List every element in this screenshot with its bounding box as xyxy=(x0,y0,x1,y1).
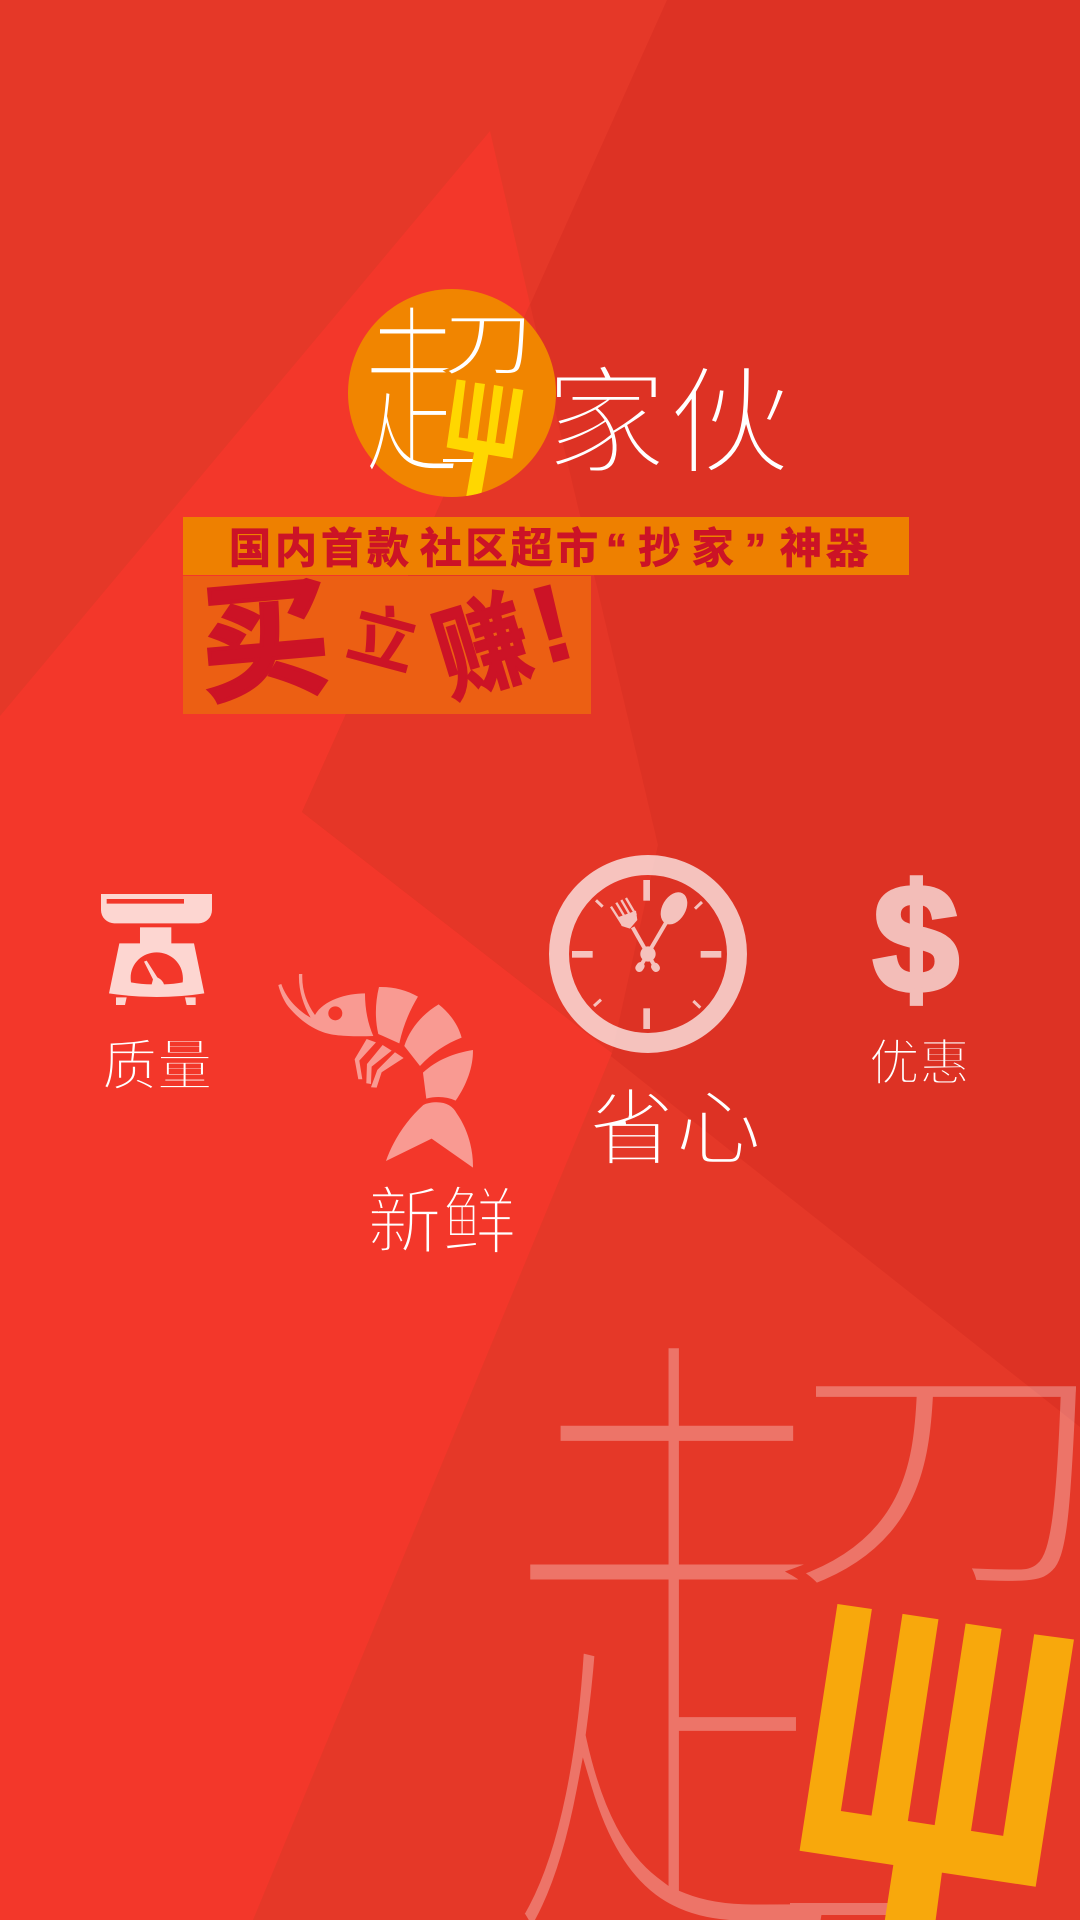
tagline text: 社区超市 xyxy=(420,525,598,572)
watermark character strokes xyxy=(524,1348,1076,1920)
tagline text: 国内首款 xyxy=(229,525,409,572)
label: 优惠 xyxy=(872,1039,966,1084)
fork hand xyxy=(611,898,656,968)
tagline text: “抄家” xyxy=(606,525,766,572)
icon: dollar sign: $ xyxy=(873,853,959,1025)
watermark: oversized logo xyxy=(524,1348,1076,1920)
tagline text: 神器 xyxy=(780,525,868,572)
logo character strokes xyxy=(370,308,524,470)
label: 新鲜 xyxy=(372,1186,512,1252)
logo: circular badge with the fork character xyxy=(348,289,556,497)
label: 省心 xyxy=(594,1089,757,1164)
slogan character: 买: 买 xyxy=(195,566,335,720)
spoon hand xyxy=(639,887,693,968)
slogan exclamation mark: ! xyxy=(519,560,585,686)
icon: kitchen scale xyxy=(101,894,212,1005)
logo text: 家伙 xyxy=(556,366,784,471)
icon: clock with fork and spoon hands xyxy=(559,865,737,1043)
icon: shrimp xyxy=(278,974,473,1168)
label: 质量 xyxy=(105,1040,209,1088)
icon: yellow fork in logo xyxy=(447,379,523,503)
icon: orange fork xyxy=(800,1604,1074,1920)
slogan character: 立: 立 xyxy=(340,594,425,685)
banner: tagline xyxy=(183,517,909,575)
slogan character: 赚: 赚 xyxy=(422,579,544,717)
panel: slogan box xyxy=(183,560,591,720)
